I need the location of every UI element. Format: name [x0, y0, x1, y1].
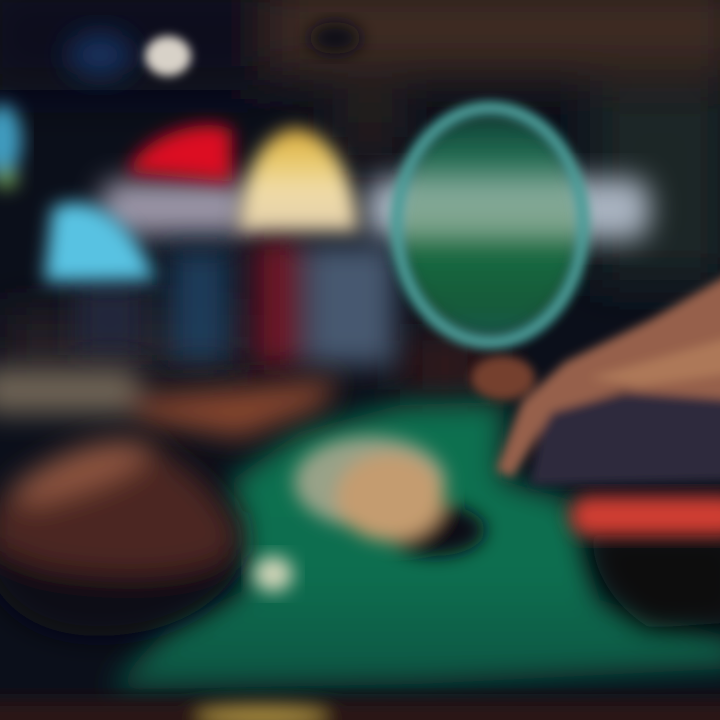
blue ceiling glow [68, 33, 132, 77]
emblem interior [398, 111, 582, 339]
small white chip [253, 556, 293, 592]
ceiling light [145, 36, 191, 76]
dark ceiling lamp [309, 22, 361, 54]
red dome [128, 125, 232, 182]
lower columns [75, 240, 395, 365]
red bowl [570, 496, 720, 628]
left edge blue logo [0, 104, 22, 189]
right hand [471, 268, 720, 485]
bowl rim [570, 496, 720, 536]
yellow dome [238, 128, 358, 232]
teal ring emblem [397, 108, 583, 342]
card and chip pile [294, 436, 485, 556]
green felt table [110, 402, 720, 690]
central pale band [100, 178, 650, 240]
background: dark room and rafters [0, 0, 720, 390]
left forearm [0, 368, 340, 438]
emblem ring [397, 108, 583, 342]
light blue blob [44, 202, 156, 282]
bottom left hand [0, 441, 242, 636]
bottom table edge [0, 700, 720, 720]
bowl body [590, 535, 720, 628]
